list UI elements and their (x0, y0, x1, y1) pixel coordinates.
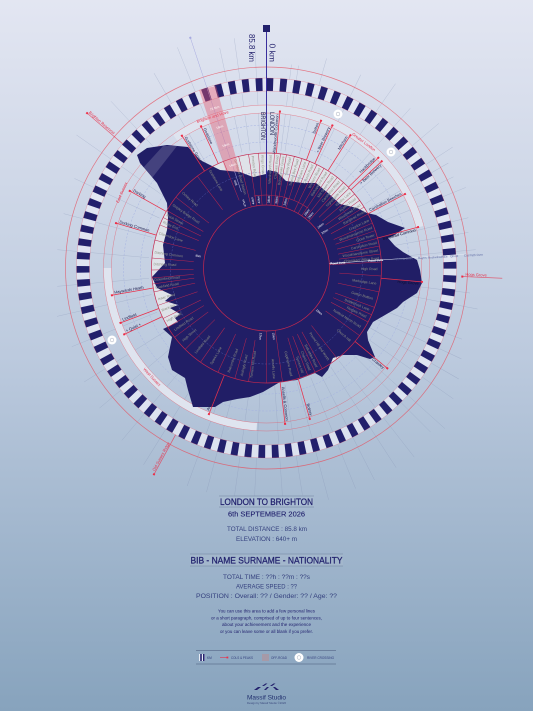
road name labels: Nightingale Road (325, 185, 347, 208)
marker: Mitcham: Mitcham (336, 135, 349, 151)
marker: Beer Brewery: + Beer Brewery (315, 126, 331, 153)
road name labels: Ockenfield Road (154, 275, 180, 282)
inner km labels: 8km (232, 179, 238, 186)
road name labels: Kings Cross (260, 155, 265, 174)
small route labels along connector: sulface (438, 254, 448, 259)
marker: Crawley (352, 341, 389, 372)
marker: Ansells Common (279, 382, 290, 425)
road name labels: Shipley Bridge Road (172, 203, 200, 225)
marker: Bolney (297, 377, 315, 420)
marker: Godstone Green (181, 132, 209, 172)
off-road km labels: 18km (216, 124, 224, 130)
road name labels: Western Road (307, 167, 322, 189)
label disc (152, 153, 382, 383)
marker: Dorking Common (115, 218, 158, 236)
road name labels: Carshalton Road (351, 241, 377, 251)
road name labels: Godstone Lane (208, 169, 224, 192)
county labels: East Sussex (115, 181, 128, 204)
outer red ring (66, 67, 468, 469)
off-road sector (199, 86, 240, 172)
road name labels: Mill Green Road (317, 175, 335, 198)
legend: river crossing: RIVER CROSSING (307, 656, 334, 660)
personal paragraph: or you can leave some or all blank if you prefer. (220, 629, 313, 634)
county labels (115, 109, 377, 387)
marker: Quiet (121, 312, 163, 336)
road cuts connector (329, 254, 466, 266)
marker: Quiet: + Quiet + (125, 321, 142, 333)
off-road km labels: 19.5km (209, 105, 220, 111)
road name labels: Tooting Bec Road (288, 159, 300, 187)
road name labels: Lindfield Road (194, 335, 211, 354)
inner km labels: 38km (267, 195, 271, 203)
small route labels along connector: Victoria Drive (395, 256, 413, 261)
road name labels: Clapham Road (273, 155, 280, 179)
off-road km labels (209, 105, 237, 168)
marker: Godstone Green: Godstone Green (184, 136, 204, 163)
off-road km labels: 14km (229, 162, 237, 168)
outer marker: Hogs Grove peak: Hogs Grove (465, 272, 488, 278)
small route labels along connector: Bushell (428, 255, 438, 260)
inner km labels (195, 179, 329, 341)
marker: Haywards Heath: Haywards Heath (114, 285, 144, 295)
road name labels: Chipstead Valley Road (344, 256, 379, 263)
marker: Hackbridge (345, 153, 380, 188)
road name labels: Bishopsford Road (310, 171, 328, 197)
road name labels: Balcombe Road (304, 344, 319, 368)
personal paragraph: You can use this area to add a few personal lines (218, 609, 316, 614)
road name labels: Preston Road (251, 156, 257, 177)
label: 0 km: 0 km (268, 44, 276, 62)
pale route band (98, 47, 428, 427)
road name labels: High Street (182, 328, 197, 342)
marker: Dorking Common: Dorking Common (119, 219, 150, 233)
marker: Banstead Common: Banstead Common (382, 227, 416, 241)
route markers (86, 109, 502, 476)
county labels: Brighton and Hove (196, 109, 230, 124)
road name labels: High Road (361, 267, 378, 271)
distance: TOTAL DISTANCE : 85.8 km (227, 527, 307, 533)
marker: Lindfield (118, 304, 159, 324)
personal paragraph: or a short paragraph, comprised of up to four sentences, (211, 615, 322, 620)
road name labels: Cuckfield Road (155, 282, 179, 290)
marker: Beer Brewery 2: + Beer Brewery (359, 163, 382, 185)
outer road ring (152, 153, 382, 383)
road name labels: Banstead Road (343, 210, 365, 225)
legend: cols and peaks: COLS & PEAKS (231, 656, 253, 660)
marker: Hogs Grove: Hogs Grove (397, 279, 420, 286)
road name labels: Mitcham Lane (296, 161, 307, 183)
road name labels: Balcombe Road (227, 348, 239, 373)
legend: off-road: OFF-ROAD (271, 656, 288, 660)
marker: Wandsworth Common: Wandsworth Common (271, 114, 280, 154)
road name labels: Ansells Lane (271, 359, 276, 379)
road name labels: Isaac Road (157, 293, 176, 301)
road name labels: Lindfield Road (173, 316, 194, 332)
inner km labels: 26km (307, 211, 315, 219)
marker: Crawley: Crawley (371, 357, 385, 370)
road name labels: Westmead Road (338, 203, 361, 221)
radial grid lines (57, 38, 478, 508)
personal paragraph (211, 609, 322, 634)
road name labels: Ardingly Road (240, 354, 249, 377)
marker: Beer Brewery (310, 122, 334, 164)
off-road km labels: 16km (222, 142, 230, 148)
road name labels: Bottlebrush Lane (344, 298, 370, 312)
road cuts connector: Road Cuts (330, 260, 346, 266)
marker: Haywards Heath (110, 283, 153, 296)
inner km labels: 15km (271, 332, 276, 341)
elevation profile (137, 145, 422, 407)
band edge rings (104, 105, 430, 431)
inner km arc (254, 187, 308, 217)
start line and axis (263, 25, 270, 178)
road name labels: Ditchling Common (154, 250, 183, 258)
legend (196, 650, 336, 664)
road name labels: Woodmansterne Road (339, 226, 373, 242)
title: LONDON TO BRIGHTON (220, 497, 313, 507)
outer marker: Hogs Grove peak (461, 272, 502, 279)
road name labels: Trinity Road (284, 157, 292, 176)
marker: Hogs Grove (381, 277, 423, 286)
total time: TOTAL TIME : ??h : ??m : ??s (223, 575, 310, 581)
outer marker: Brighton Reservoir (86, 109, 126, 145)
date: 6th SEPTEMBER 2026 (228, 510, 305, 518)
inner km labels: 24km (316, 222, 325, 230)
small route labels along connector: Cut Path Over (464, 253, 483, 258)
average speed: AVERAGE SPEED : ?? (236, 584, 298, 590)
county labels: Greater London (351, 131, 377, 152)
road name labels: Rusty End (162, 220, 179, 231)
road name labels: Rook Street (166, 213, 184, 226)
position: POSITION : Overall: ?? / Gender: ?? / Age: ?? (196, 594, 338, 600)
inner km labels: 12km (258, 333, 263, 341)
credit: Design by Massif Studio ©2026 (247, 701, 286, 705)
marker: Sutton: Sutton (311, 122, 320, 134)
road name labels: Ruskin Road (339, 197, 357, 213)
road name labels: Woodmansterne Street (342, 249, 378, 258)
personal paragraph: about your achievement and the experience (222, 622, 312, 627)
road name labels: Black Rd (161, 303, 176, 312)
title block (190, 496, 343, 634)
name line: BIB - NAME SURNAME - NATIONALITY (190, 555, 342, 565)
marker: Dorking (128, 186, 169, 212)
road name labels: Clock Tower (356, 233, 376, 243)
road name labels: Ditchling Road (153, 262, 176, 267)
marker: Ardingly: Ardingly (205, 396, 215, 411)
elevation: ELEVATION : 640+ m (236, 537, 297, 543)
outer marker: Brighton Reservoir: Brighton Reservoir (88, 110, 117, 136)
road name labels: Turners Hill (295, 356, 304, 374)
outer marker: Old Sussex: Old Sussex Ridge (151, 441, 171, 472)
river crossing icons (108, 110, 396, 344)
marker: Ansells Common: Ansells & Common (281, 387, 290, 421)
inner km labels: 33km (282, 197, 288, 206)
road name labels: Bolingbroke Grove (277, 156, 285, 185)
inner km labels: 28km (303, 208, 311, 217)
legend: km: KM (207, 656, 212, 660)
inner km labels: 36km (274, 196, 279, 204)
road dividers (152, 153, 381, 383)
road name labels: Godstone Road Station (233, 159, 247, 195)
county labels: West Sussex (142, 367, 162, 387)
small route labels along connector: Bayes (418, 256, 427, 260)
road name labels: Church Road (300, 350, 312, 371)
small route labels along connector: Ghost (450, 254, 458, 258)
inner km labels: 22km (321, 228, 329, 235)
marker: Dorking: Dorking (132, 188, 147, 199)
road name labels: Reigate Road (346, 306, 367, 319)
dashed ring on profile (170, 172, 362, 364)
kilometre tick ring (76, 78, 456, 458)
title highlight (219, 496, 314, 507)
road name labels: Turners Hill Road (249, 351, 257, 378)
marker: Beer Brewery 2 (350, 160, 385, 193)
marker: Carshalton Beeches: Carshalton Beeches (368, 191, 402, 212)
marker: Banstead Common (377, 226, 420, 242)
road name labels: Ockley Road (181, 191, 199, 207)
marker: Mitcham (324, 132, 352, 171)
label: BRIGHTON: BRIGHTON (259, 112, 265, 140)
inner km labels: 42km (256, 195, 261, 204)
inner km labels: 47km (241, 198, 247, 207)
logo mark (254, 684, 279, 690)
road name labels: Pound Hill and Worth (308, 332, 330, 361)
marker: Ardingly (204, 373, 225, 415)
off-road wedge on profile (143, 146, 177, 178)
inner km labels: 44km (250, 196, 256, 205)
marker: Godstone: Godstone (202, 127, 214, 146)
name highlight (190, 554, 343, 566)
label: 85.8 km: 85.8 km (247, 34, 256, 62)
road name labels: Wrythe Lane (335, 191, 352, 207)
dashed distance rings (124, 125, 410, 411)
marker: Lindfield: Lindfield (122, 312, 137, 322)
road name labels: Church Road (302, 164, 314, 185)
marker: Sutton (302, 118, 322, 160)
road name labels: Markedge Lane (352, 278, 377, 286)
road name labels: Carshalton Road (321, 180, 341, 203)
road cuts connector: Road Cuts (368, 258, 384, 263)
road name labels: Gatton Bottom (351, 291, 374, 301)
road name labels: Copthorne Road (284, 351, 293, 377)
road name labels: Sparks Lane (209, 346, 223, 365)
inner chart (86, 37, 502, 476)
road name labels: Church Hill (336, 328, 352, 343)
off-road crossing line (189, 37, 241, 192)
marker: Bolney: Bolney (306, 403, 314, 416)
road name labels: Croydon Lane (348, 219, 370, 232)
radial chart: rings and grid (57, 38, 478, 508)
road name labels: High Road (166, 312, 182, 323)
small route labels along connector (395, 253, 483, 261)
centre disc (204, 205, 330, 331)
outer marker: Old Sussex (149, 432, 176, 476)
label: LONDON: LONDON (268, 112, 274, 135)
road name labels (153, 155, 379, 379)
road name labels: Nutfield Marsh Road (332, 308, 362, 329)
road name labels: Clarendon Lane (158, 231, 183, 243)
marker: Godstone (200, 123, 223, 164)
studio name: Massif Studio (247, 694, 286, 701)
inner km labels: 18km (315, 308, 324, 316)
marker: Hackbridge: Hackbridge (358, 156, 377, 174)
road name labels: Wandsworth Road (268, 155, 273, 184)
inner km labels: 8km (195, 254, 202, 259)
